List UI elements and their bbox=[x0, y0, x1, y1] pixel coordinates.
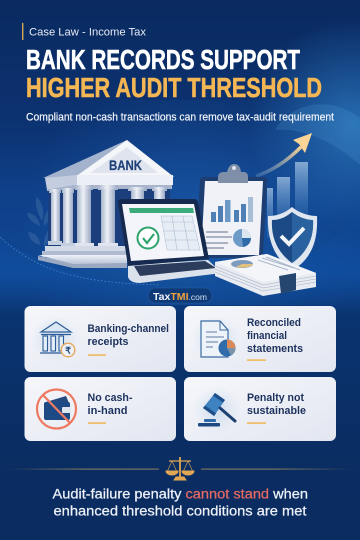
icon: laptop with spreadsheet bbox=[118, 199, 222, 283]
title bbox=[26, 44, 322, 103]
icon: arrow and rising bars bbox=[256, 133, 312, 238]
card text bbox=[247, 317, 303, 355]
card text: receipts bbox=[88, 336, 128, 348]
card text: Penalty not bbox=[247, 392, 304, 404]
card text: Reconciled bbox=[247, 317, 301, 329]
hero illustration bbox=[27, 133, 317, 303]
icon: bank building bbox=[38, 140, 174, 268]
card text: in-hand bbox=[88, 405, 128, 417]
card text bbox=[88, 323, 169, 348]
footer statement: enhanced threshold conditions are met bbox=[54, 504, 307, 518]
panel: Banking-channel receipts bbox=[24, 306, 176, 372]
bank label: BANK bbox=[109, 158, 142, 173]
header label: Case Law - Income Tax: Case Law - Income Tax bbox=[29, 26, 146, 38]
panel: No cash-in-hand bbox=[24, 377, 176, 441]
footer statement bbox=[52, 486, 308, 518]
panel: Penalty not sustainable bbox=[184, 377, 336, 441]
icon: document with pie bbox=[192, 315, 240, 363]
header label: Case Law - Income Tax bbox=[22, 23, 146, 40]
card text: Banking-channel bbox=[88, 323, 169, 335]
card text: No cash- bbox=[88, 392, 133, 404]
icon: leaves bbox=[27, 197, 51, 247]
icon: shield with check bbox=[268, 207, 317, 268]
subtitle: Compliant non-cash transactions can remove tax-audit requirement bbox=[26, 112, 334, 124]
panel: Reconciled financial statements bbox=[184, 306, 336, 372]
logo: TaxTMI.com: TaxTMI.com bbox=[153, 291, 207, 303]
logo: TaxTMI.com bbox=[148, 288, 212, 303]
icon: clipboard report bbox=[196, 164, 267, 258]
icon: crossed wallet bbox=[37, 390, 76, 428]
divider with scales icon bbox=[8, 457, 352, 480]
icon: gavel bbox=[193, 386, 241, 434]
card text bbox=[247, 392, 306, 417]
card text: sustainable bbox=[247, 405, 306, 417]
footer statement: Audit-failure penalty cannot stand when bbox=[52, 486, 308, 502]
card text: statements bbox=[247, 343, 303, 355]
icon: bank with rupee: ₹ bbox=[65, 346, 71, 356]
icon: scales of justice bbox=[166, 457, 194, 480]
card text: financial bbox=[247, 330, 287, 342]
icon: stack of papers bbox=[215, 254, 316, 296]
icon: bank with rupee bbox=[31, 315, 79, 363]
card text bbox=[88, 392, 133, 417]
